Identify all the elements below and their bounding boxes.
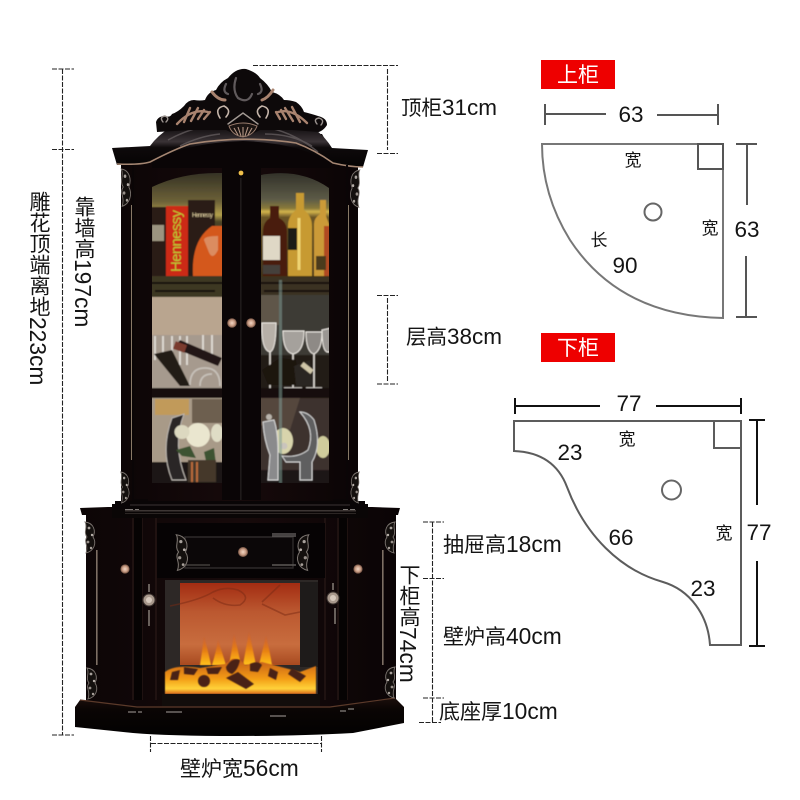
left top compartment [152, 173, 222, 278]
panel reflections [170, 585, 300, 615]
lower corner square [714, 421, 741, 448]
fireplace back panel [180, 583, 300, 665]
middle curve value: 66 [608, 525, 634, 550]
upper height value: 63 [734, 217, 760, 242]
shelf height dimension [377, 296, 398, 384]
top crown dimension [253, 66, 398, 154]
rose ornaments [143, 583, 339, 626]
upper centre circle [644, 204, 662, 220]
fireplace [162, 580, 320, 708]
upper long label: 长 [590, 231, 608, 250]
drawer ornaments [176, 535, 309, 570]
lower top moulding [112, 504, 368, 518]
label: overall height: 雕花顶端离地 223cm [25, 191, 51, 385]
upper cabinet [112, 69, 368, 509]
lower centre circle [662, 480, 681, 500]
lower top width label: 宽 [618, 430, 636, 449]
label: base thickness: 底座厚10cm [439, 698, 558, 724]
drawer front [157, 523, 325, 578]
label: shelf height: 层高38cm [406, 324, 502, 349]
fireplace base strip [162, 694, 320, 708]
red Hennessy box: Hennessy [168, 210, 185, 272]
upper badge: 上柜 [557, 64, 599, 87]
gloss highlights [168, 124, 318, 152]
glowing logs [165, 659, 316, 694]
lower side width label: 宽 [716, 524, 732, 543]
label: wall-side height: 靠墙高 197cm [70, 196, 96, 327]
fireplace width dimension [150, 736, 322, 752]
upper cabinet plan [541, 60, 760, 318]
label: crown height: 顶柜31cm [401, 95, 497, 120]
side door edges and columns [96, 518, 384, 700]
red Hennessy box [166, 206, 188, 276]
carved crown [156, 69, 327, 138]
upper corner square [698, 144, 723, 169]
left window contents [150, 168, 224, 485]
label: lower cabinet height: 下柜高 74cm [395, 564, 421, 683]
right curve value: 23 [690, 576, 716, 601]
label: drawer height: 抽屉高18cm [443, 531, 562, 557]
lower height dimension [749, 420, 765, 646]
upper top width label: 宽 [624, 151, 642, 170]
upper base ledge [115, 501, 365, 509]
right top compartment [261, 173, 329, 278]
lower badge [541, 333, 615, 362]
left lower compartment [150, 398, 224, 485]
lower cabinet [75, 504, 404, 736]
crown arch and cornice [112, 128, 368, 167]
third bottle [314, 200, 331, 276]
right lower compartment [259, 398, 331, 485]
dark box [150, 207, 166, 276]
centre stile [222, 165, 261, 500]
fill behind arch [152, 134, 331, 168]
lower cabinet dimensions [419, 522, 444, 722]
upper corner ornaments [121, 169, 360, 503]
upper height dimension [736, 144, 757, 317]
bronze cornice line [117, 139, 363, 167]
right window contents [259, 168, 331, 485]
label: fireplace width: 壁炉宽56cm [180, 755, 299, 781]
left window [150, 168, 224, 485]
flames [200, 632, 272, 665]
lower badge: 下柜 [557, 337, 599, 360]
left middle compartment [150, 277, 224, 392]
drawer knob [238, 547, 248, 557]
label: fireplace height: 壁炉高40cm [443, 623, 562, 649]
upper side width label: 宽 [702, 219, 718, 238]
lower height value: 77 [746, 520, 772, 545]
upper body [121, 160, 358, 505]
plinth [75, 698, 404, 736]
whisky bottle [263, 206, 287, 276]
right middle compartment [259, 277, 331, 392]
lower cabinet body [80, 507, 400, 710]
upper badge [541, 60, 615, 89]
right shelf [259, 388, 331, 398]
dark log shapes [170, 659, 306, 689]
corner ornaments [85, 522, 395, 699]
side silver lines [132, 205, 348, 460]
left curve value: 23 [557, 440, 583, 465]
amber bottle [288, 193, 312, 276]
lower width dimension [515, 398, 741, 414]
Hennessy black box [188, 200, 224, 276]
dashed dimension lines [52, 66, 444, 752]
glass edge reflection [279, 280, 282, 483]
fireplace glass frame [165, 580, 318, 697]
upper width dimension [545, 104, 718, 125]
overall height dimension [52, 69, 74, 735]
crown shell [229, 123, 257, 137]
lower outline [514, 421, 741, 645]
upper quarter-circle outline [542, 144, 723, 318]
upper arc value: 90 [612, 253, 638, 278]
door knobs [227, 318, 256, 328]
Hennessy black box: Hennessy [192, 213, 213, 219]
right window [259, 168, 331, 485]
cabinet photo [75, 69, 404, 736]
lower cabinet plan [514, 333, 772, 646]
upper column shadows [133, 165, 347, 500]
crown leaves [161, 78, 323, 125]
lower width value: 77 [616, 391, 642, 416]
crown silhouette [156, 69, 327, 138]
left shelf [150, 388, 224, 398]
upper width value: 63 [618, 102, 644, 127]
side door knobs [120, 564, 363, 574]
